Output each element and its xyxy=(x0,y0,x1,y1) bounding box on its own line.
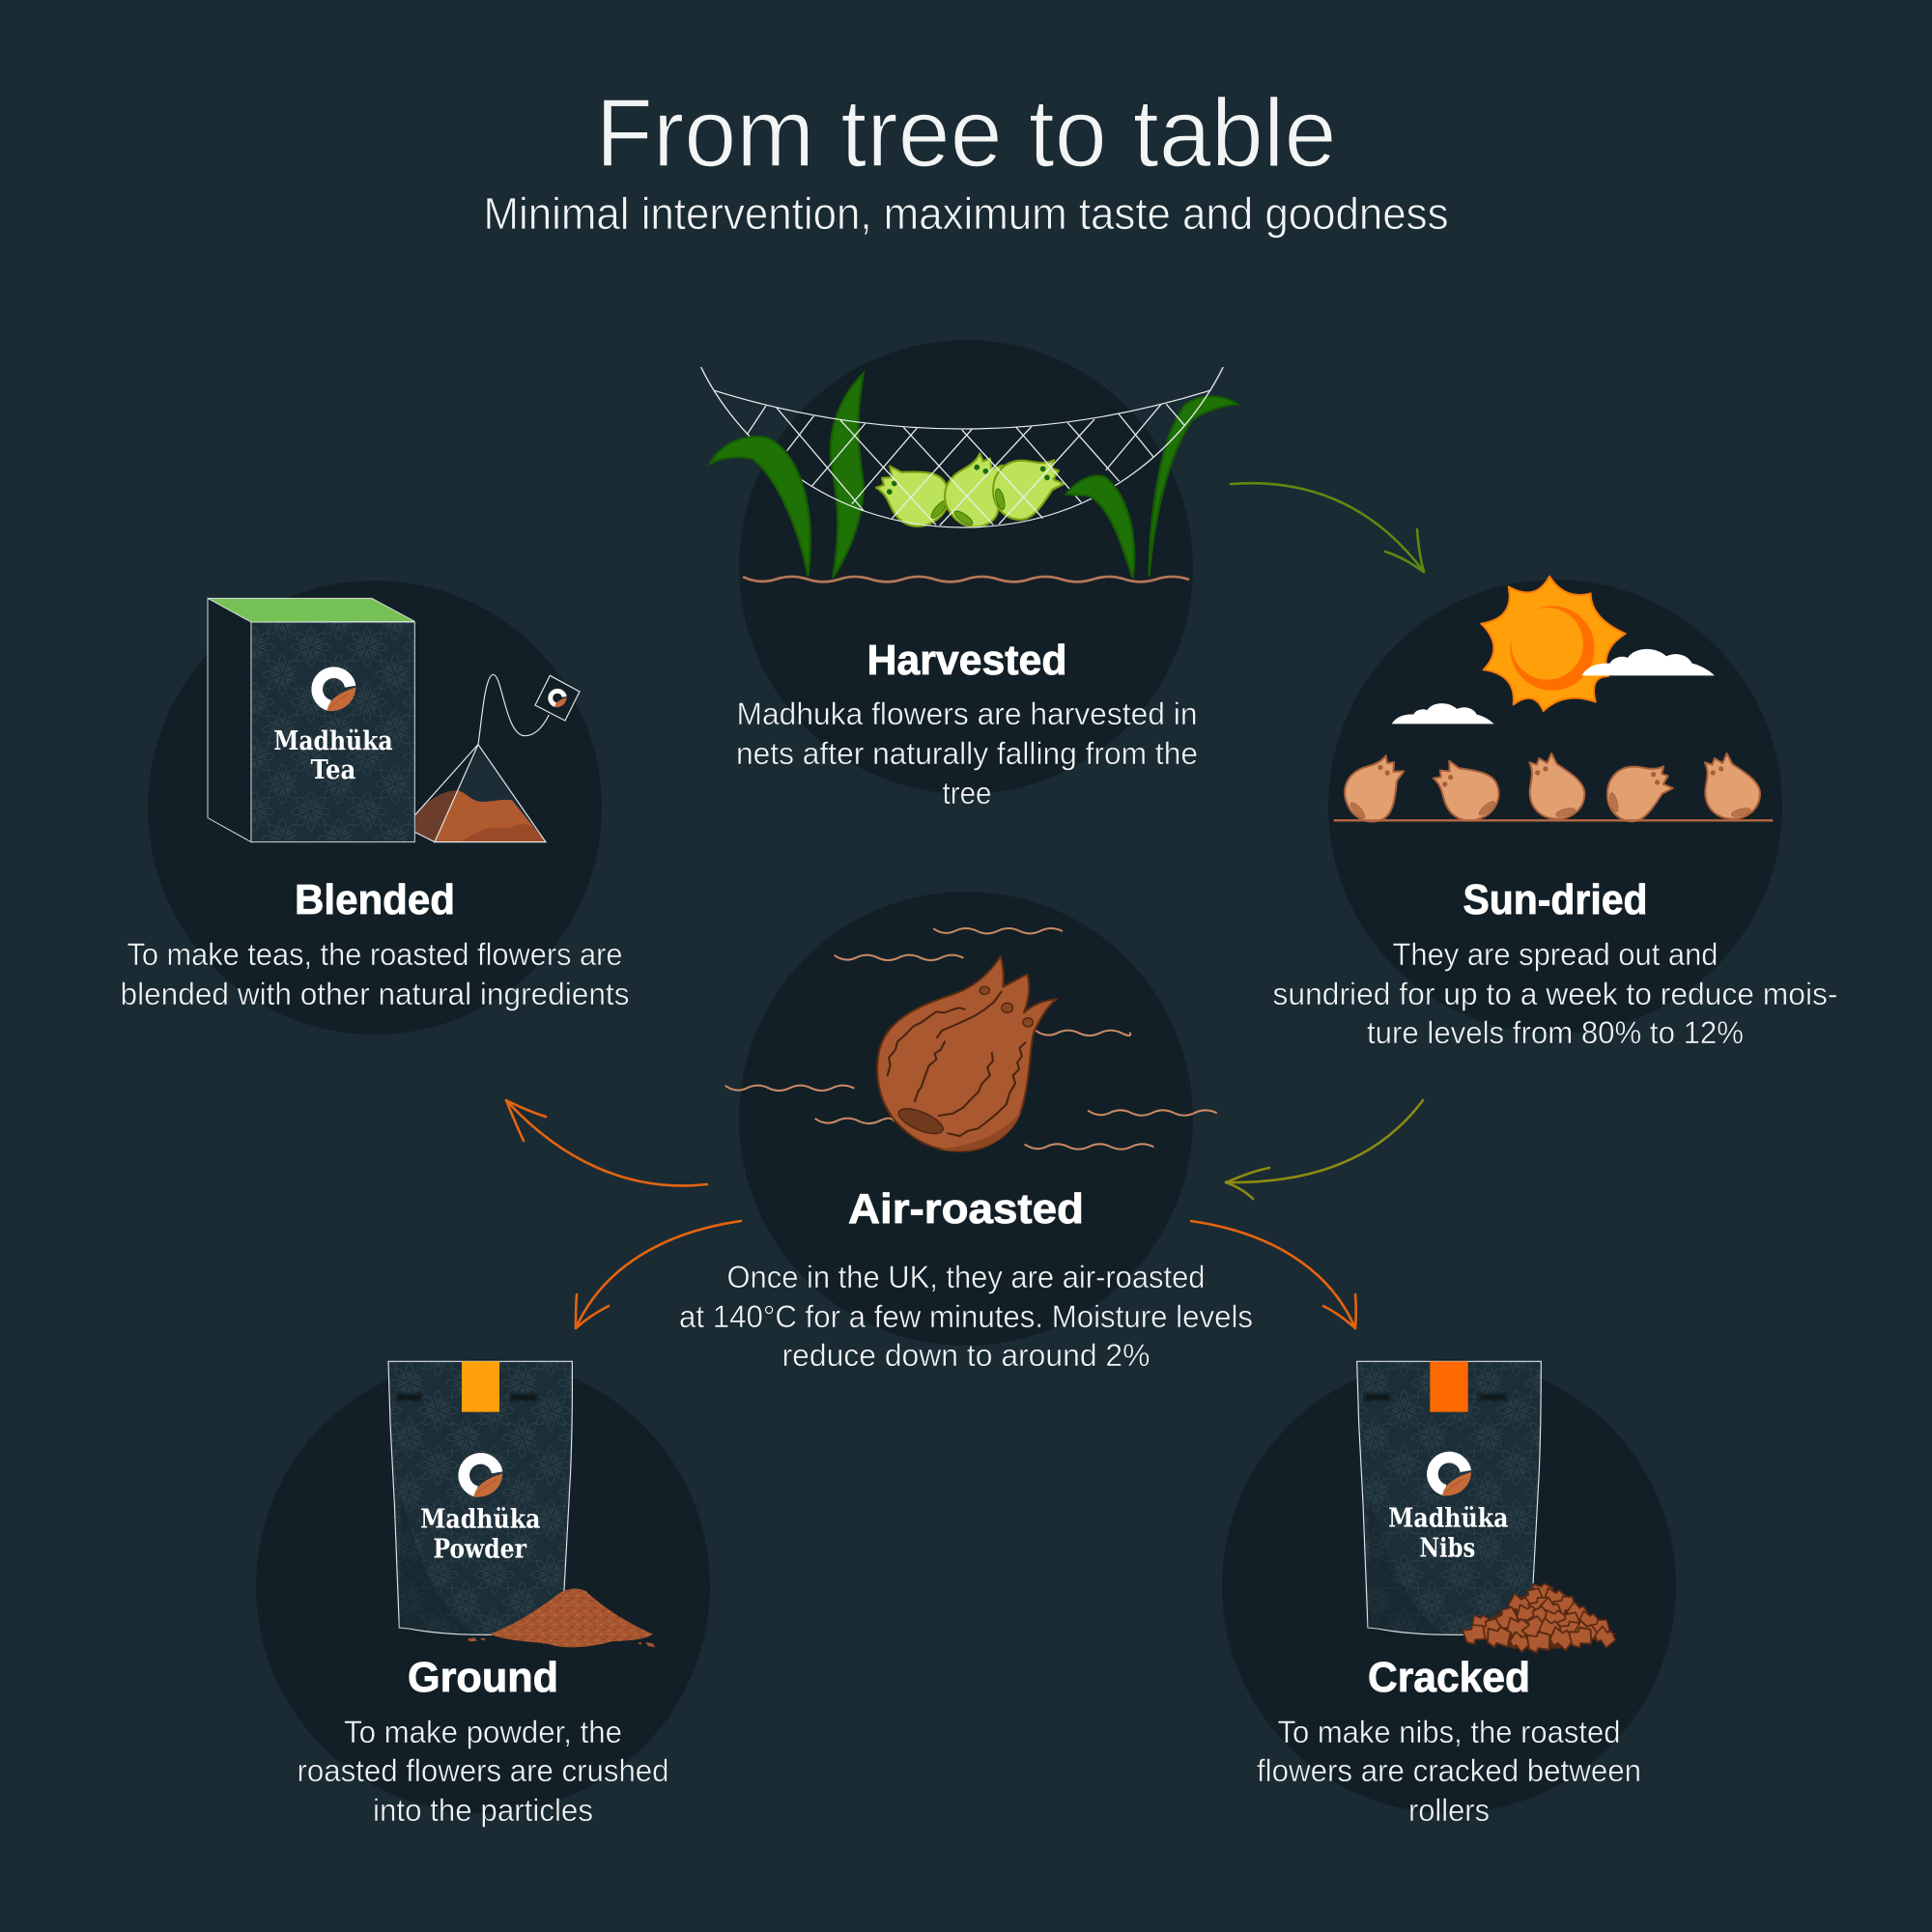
title: From tree to table xyxy=(595,79,1337,187)
text: Cracked description xyxy=(1257,1715,1641,1828)
icon: tea box and tea bag xyxy=(208,598,580,842)
text: Cracked description: To make nibs, the roasted xyxy=(1277,1715,1621,1749)
arrow: Sun-dried to Air-roasted xyxy=(1226,1100,1423,1199)
icon: powder pouch and pile: Powder xyxy=(433,1534,527,1564)
panel: Harvested xyxy=(701,340,1237,810)
text: Blended description: blended with other natural ingredients xyxy=(120,977,630,1011)
icon: powder pouch and pile xyxy=(388,1361,655,1647)
arrow: Air-roasted to Cracked xyxy=(1191,1221,1356,1328)
heading: Air-roasted: Air-roasted xyxy=(848,1185,1084,1233)
heading: Blended: Blended xyxy=(295,876,455,923)
icon: roasted flower with heat waves xyxy=(725,928,1216,1151)
text: Harvested description: Madhuka flowers are harvested in xyxy=(736,696,1198,731)
icon: tea box and tea bag: Madhüka xyxy=(273,726,393,756)
text: Air-roasted description: reduce down to around 2% xyxy=(782,1338,1150,1373)
text: Air-roasted description: Once in the UK, they are air-roasted xyxy=(726,1260,1206,1294)
panel: Air-roasted xyxy=(679,892,1253,1373)
panel: Blended xyxy=(120,581,630,1035)
panel: Ground xyxy=(256,1359,710,1828)
icon: tea box and tea bag: Tea xyxy=(311,755,355,785)
icon: nibs pouch and pile xyxy=(1357,1361,1618,1654)
text: Cracked description: rollers xyxy=(1408,1793,1490,1828)
text: Sun-dried description xyxy=(1273,937,1837,1050)
heading: Cracked: Cracked xyxy=(1368,1654,1530,1701)
text: Blended description xyxy=(120,937,630,1011)
icon: powder pouch and pile: Madhüka xyxy=(420,1505,540,1535)
text: Harvested description: nets after naturally falling from the xyxy=(736,736,1198,771)
icon: nibs pouch and pile: Nibs xyxy=(1419,1533,1475,1563)
panel: Cracked xyxy=(1222,1359,1676,1828)
arrow: Harvested to Sun-dried xyxy=(1231,483,1424,572)
arrow: Air-roasted to Blended xyxy=(506,1100,707,1185)
text: Sun-dried description: They are spread out and xyxy=(1393,937,1718,972)
text: Sun-dried description: ture levels from 80% to 12% xyxy=(1367,1015,1744,1050)
text: Air-roasted description xyxy=(679,1260,1253,1373)
panel: Sun-dried xyxy=(1273,577,1837,1050)
text: Cracked description: flowers are cracked between xyxy=(1257,1753,1641,1788)
icon: nibs pouch and pile: Madhüka xyxy=(1388,1504,1508,1534)
text: Air-roasted description: at 140°C for a few minutes. Moisture levels xyxy=(679,1299,1253,1334)
text: Harvested description xyxy=(736,696,1198,810)
heading: Ground: Ground xyxy=(408,1654,558,1701)
text: Ground description: into the particles xyxy=(373,1793,593,1828)
icon: sun, clouds and drying flowers xyxy=(1334,577,1773,831)
text: Ground description: roasted flowers are crushed xyxy=(298,1753,668,1788)
heading: Harvested: Harvested xyxy=(867,637,1066,684)
icon: net with flowers and leaves xyxy=(701,367,1237,582)
text: Harvested description: tree xyxy=(943,776,991,810)
heading: Sun-dried: Sun-dried xyxy=(1463,876,1648,923)
text: Sun-dried description: sundried for up to a week to reduce mois- xyxy=(1273,977,1837,1011)
text: Ground description: To make powder, the xyxy=(344,1715,622,1749)
subtitle: Minimal intervention, maximum taste and goodness xyxy=(483,188,1449,239)
text: Ground description xyxy=(298,1715,668,1828)
text: Blended description: To make teas, the roasted flowers are xyxy=(128,937,622,972)
arrow: Air-roasted to Ground xyxy=(576,1221,741,1328)
